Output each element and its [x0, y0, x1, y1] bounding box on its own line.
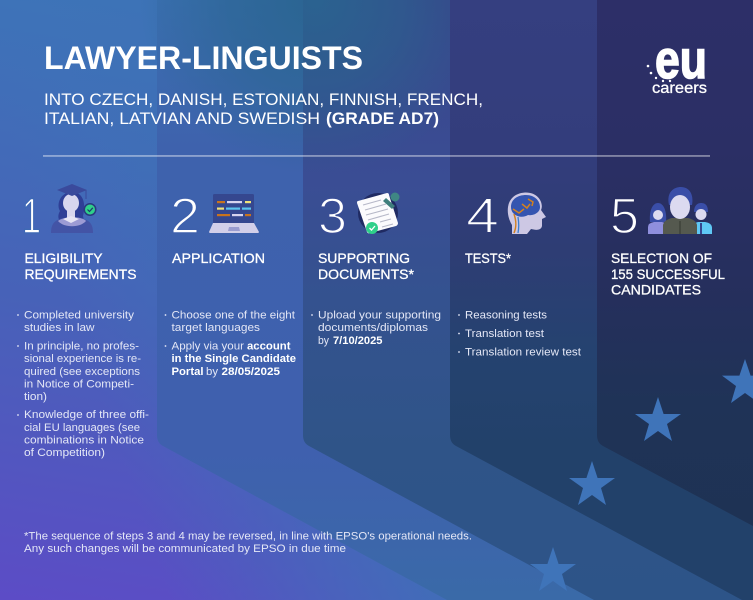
bullet list: Portal: [172, 366, 204, 378]
bullet list: Apply via your: [172, 341, 244, 353]
bullet list: account: [247, 341, 291, 353]
divider: [43, 155, 710, 157]
subtitle: INTO CZECH, DANISH, ESTONIAN, FINNISH, FRENCH,: [44, 90, 483, 109]
decorative stars: [530, 359, 753, 591]
heading: SUPPORTING: [318, 250, 410, 266]
bullet list: In principle, no profes-: [24, 341, 139, 353]
heading: REQUIREMENTS: [24, 266, 136, 282]
step 2: application: [165, 188, 296, 378]
bullet list: Translation test: [465, 328, 544, 340]
number 1: 1: [22, 188, 41, 244]
logo: EU careers: careers: [652, 80, 707, 97]
heading: APPLICATION: [172, 250, 265, 266]
number 5: 5: [610, 188, 639, 244]
bullet list: Choose one of the eight: [172, 310, 295, 322]
logo: EU careers: eu: [655, 30, 707, 90]
icon: laptop: [209, 194, 259, 233]
bullet list: Knowledge of three offi-: [24, 409, 149, 421]
subtitle: ITALIAN, LATVIAN AND SWEDISH: [44, 109, 320, 128]
bullet list: by: [206, 366, 219, 378]
bullet list: Completed university: [24, 310, 135, 322]
step 3: supporting documents: [311, 188, 441, 347]
bullet list: [165, 310, 296, 378]
subtitle: (GRADE AD7): [326, 109, 439, 128]
bullet list: Translation review test: [465, 346, 581, 358]
bullet list: Reasoning tests: [465, 310, 548, 322]
heading: [611, 250, 725, 298]
step 1: eligibility: [17, 184, 149, 459]
bullet list: quired (see exceptions: [24, 366, 141, 378]
bullet list: target languages: [172, 322, 261, 334]
heading: [318, 250, 415, 282]
bullet list: by: [318, 335, 330, 347]
bullet list: 28/05/2025: [222, 366, 280, 378]
bullet list: Upload your supporting: [318, 310, 441, 322]
bullet list: sional experience is re-: [24, 353, 141, 365]
icon: head with brain: [508, 192, 546, 234]
number 3: 3: [318, 188, 347, 244]
heading: CANDIDATES: [611, 282, 701, 298]
bullet list: [458, 310, 581, 358]
bullet list: studies in law: [24, 322, 95, 334]
logo: EU careers: [647, 30, 707, 97]
icon: document with stamp: [357, 192, 400, 234]
bullet list: [311, 310, 441, 347]
heading: TESTS*: [465, 250, 511, 266]
step 5: selection: [610, 187, 725, 298]
footnote: Any such changes will be communicated by EPSO in due time: [24, 543, 346, 555]
bullet list: in Notice of Competi-: [24, 378, 134, 390]
icon: group of people: [648, 187, 712, 234]
bullet list: 7/10/2025: [333, 335, 382, 347]
footnote: [24, 530, 472, 555]
bullet list: documents/diplomas: [318, 322, 429, 334]
subtitle: [44, 90, 483, 128]
heading: SELECTION OF: [611, 250, 712, 266]
bullet list: cial EU languages (see: [24, 422, 140, 434]
heading: ELIGIBILITY: [24, 250, 103, 266]
bullet list: in the Single Candidate: [172, 353, 296, 365]
step 4: tests: [458, 188, 581, 358]
bullet list: of Competition): [24, 447, 105, 459]
title: LAWYER-LINGUISTS: [44, 40, 363, 76]
number 2: 2: [170, 188, 200, 244]
bullet list: tion): [24, 391, 47, 403]
heading: 155 SUCCESSFUL: [611, 266, 725, 282]
icon: graduate: [51, 184, 96, 233]
footnote: *The sequence of steps 3 and 4 may be reversed, in line with EPSO's operational needs.: [24, 530, 472, 542]
number 4: 4: [466, 188, 499, 244]
heading: [24, 250, 136, 282]
bullet list: combinations in Notice: [24, 434, 144, 446]
bullet list: [17, 310, 149, 459]
heading: DOCUMENTS*: [318, 266, 415, 282]
